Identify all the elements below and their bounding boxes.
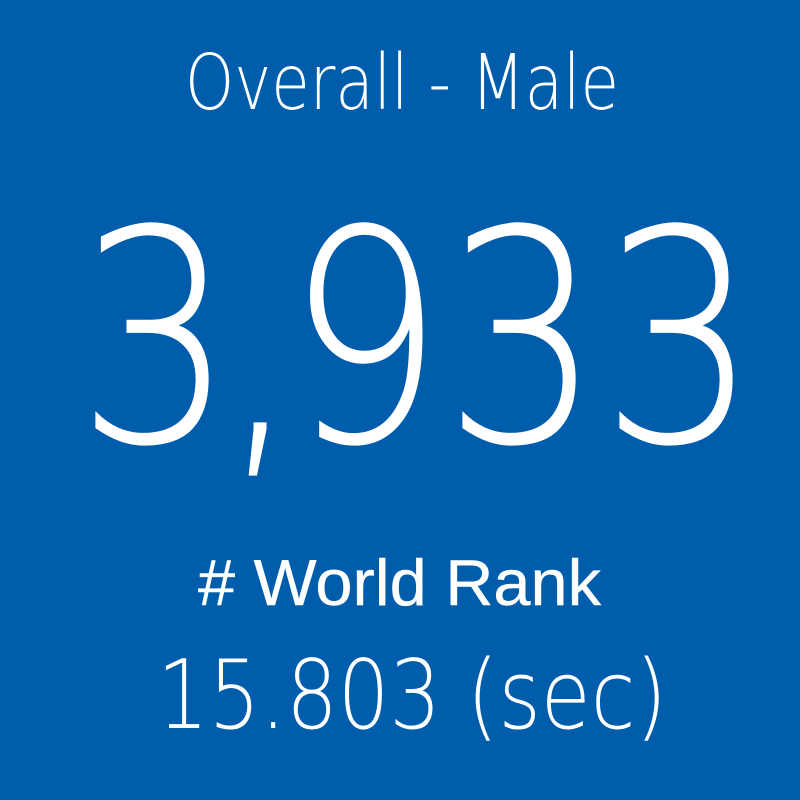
time value: 15.803 (sec) xyxy=(157,641,667,751)
title: Overall - Male xyxy=(185,39,619,128)
main value: 3,933 xyxy=(77,169,758,511)
metric label: # World Rank xyxy=(198,546,602,619)
